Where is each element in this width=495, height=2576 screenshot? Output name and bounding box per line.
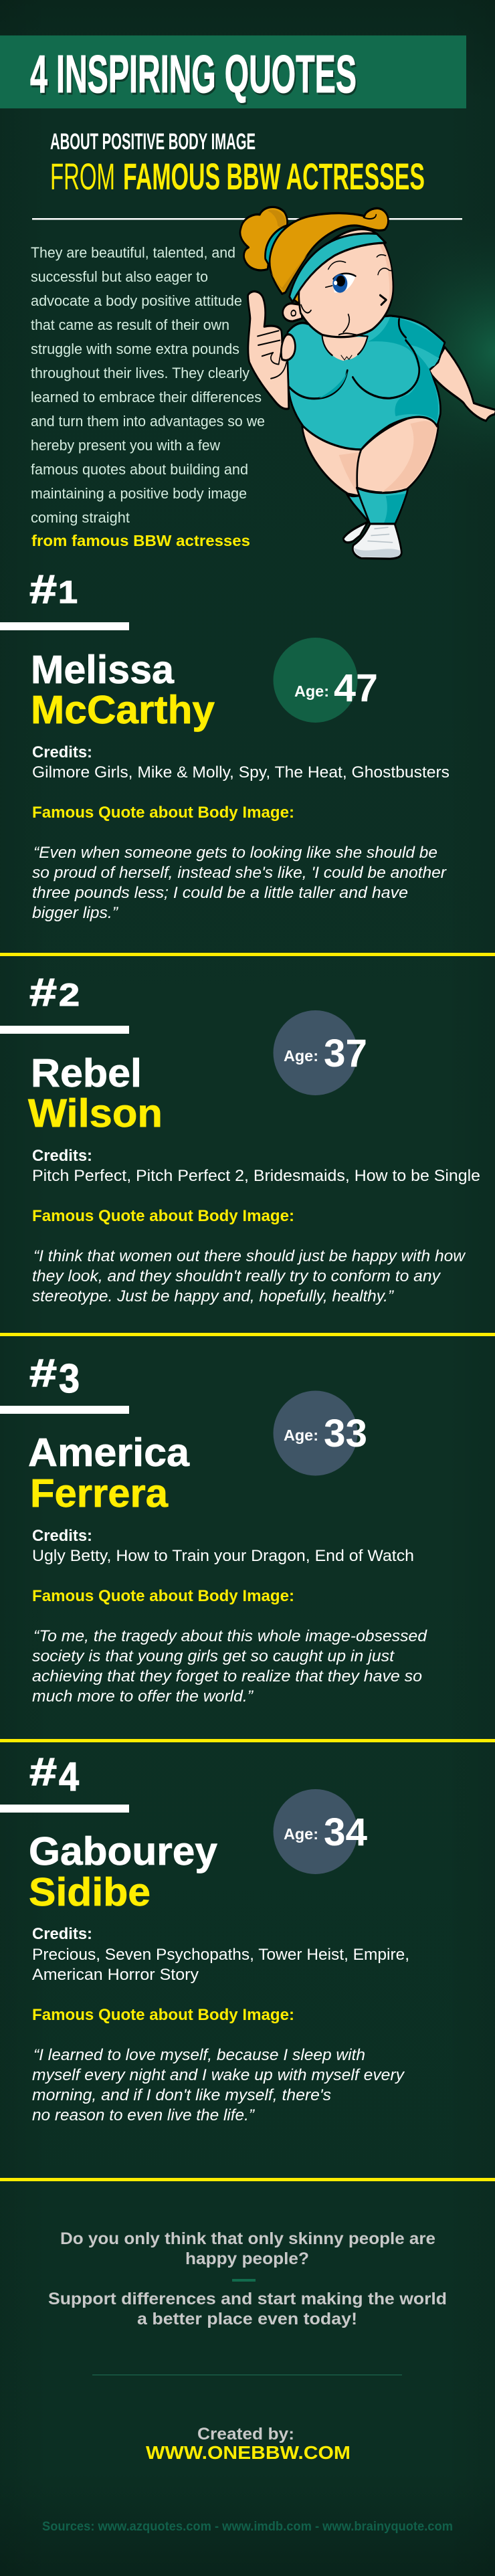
quote: Famous Quote about Body Image: <box>32 2006 294 2024</box>
intro text: from famous BBW actresses <box>31 532 250 549</box>
age badge <box>273 638 378 723</box>
section 4: Gabourey Sidibe <box>0 1750 409 2124</box>
rank number: 3 <box>59 1356 80 1401</box>
section 2: Rebel Wilson <box>0 971 480 1305</box>
name: Ferrera <box>30 1471 169 1515</box>
intro text: throughout their lives. They clearly <box>31 365 250 381</box>
quote <box>32 1207 466 1305</box>
credits: Pitch Perfect, Pitch Perfect 2, Bridesmaids, How to be Single <box>32 1167 480 1185</box>
intro text: They are beautiful, talented, and <box>31 244 235 261</box>
name: Gabourey <box>29 1829 217 1873</box>
credits: Credits: <box>32 1925 92 1943</box>
name <box>28 1431 190 1515</box>
age badge: Age: <box>284 1047 318 1065</box>
credits <box>32 1925 409 1984</box>
name <box>31 648 215 732</box>
closing message <box>48 2229 447 2328</box>
subtitle <box>50 129 425 197</box>
closing message: a better place even today! <box>137 2310 357 2328</box>
title banner <box>0 35 466 108</box>
quote: “I learned to love myself, because I sleep with <box>33 2046 365 2064</box>
rank number: # <box>29 1352 57 1395</box>
quote: Famous Quote about Body Image: <box>32 1207 294 1225</box>
quote: three pounds less; I could be a little taller and have <box>32 884 408 902</box>
age badge: 33 <box>324 1412 367 1455</box>
intro text: coming straight <box>31 509 130 526</box>
age badge: 37 <box>324 1032 367 1075</box>
credit: created by: Created by: <box>197 2425 294 2444</box>
credit: created by <box>146 2425 351 2463</box>
intro text <box>31 244 265 549</box>
credits: Credits: <box>32 1527 92 1545</box>
credits: Credits: <box>32 1147 92 1165</box>
subtitle: ABOUT POSITIVE BODY IMAGE <box>50 129 256 155</box>
name: Wilson <box>28 1091 163 1135</box>
intro text: and turn them into advantages so we <box>31 413 265 430</box>
illustration: cartoon woman pointing <box>240 207 495 559</box>
quote <box>32 804 447 922</box>
name: America <box>28 1431 190 1475</box>
intro text: learned to embrace their differences <box>31 389 262 405</box>
quote: achieving that they forget to realize that they have so <box>32 1667 422 1685</box>
age badge: 47 <box>334 666 378 710</box>
rank number: 2 <box>59 977 80 1012</box>
age badge: Age: <box>284 1427 318 1444</box>
credits: Credits: <box>32 743 92 761</box>
rank number: # <box>29 567 57 612</box>
closing message: Support differences and start making the world <box>48 2290 447 2308</box>
quote: “I think that women out there should just be happy with how <box>33 1247 466 1265</box>
rank number: 4 <box>59 1754 80 1799</box>
rank number: 1 <box>58 574 78 610</box>
headband <box>290 234 386 302</box>
age badge: 34 <box>324 1811 367 1854</box>
age badge: Age: <box>284 1825 318 1843</box>
section 1: Melissa McCarthy <box>0 567 450 922</box>
age badge <box>273 1390 367 1476</box>
quote: no reason to even live the life.” <box>32 2106 255 2124</box>
credits: Precious, Seven Psychopaths, Tower Heist, Empire, <box>32 1946 409 1964</box>
intro text: struggle with some extra pounds <box>31 341 239 357</box>
quote: myself every night and I wake up with myself every <box>32 2066 405 2084</box>
intro text: famous quotes about building and <box>31 461 248 478</box>
age badge <box>273 1789 367 1874</box>
quote: they look, and they shouldn't really try to conform to any <box>32 1267 441 1285</box>
credits <box>32 1527 414 1565</box>
quote: so proud of herself, instead she's like, 'I could be another <box>32 864 447 882</box>
closing message: Do you only think that only skinny people are <box>60 2229 435 2248</box>
closing message: happy people? <box>185 2249 309 2268</box>
name: Rebel <box>31 1051 142 1095</box>
quote: “To me, the tragedy about this whole image-obsessed <box>33 1627 427 1645</box>
credits: Gilmore Girls, Mike & Molly, Spy, The Heat, Ghostbusters <box>32 763 450 781</box>
pointing hand <box>248 292 295 409</box>
section 3: America Ferrera <box>0 1352 427 1706</box>
name: Melissa <box>31 648 175 692</box>
credits <box>32 1147 480 1185</box>
subtitle: FROM <box>50 155 115 197</box>
quote <box>32 1587 427 1706</box>
quote: much more to offer the world.” <box>32 1687 254 1706</box>
name <box>29 1829 217 1914</box>
intro text: successful but also eager to <box>31 268 208 285</box>
intro text: hereby present you with a few <box>31 437 220 454</box>
quote: society is that young girls get so caught up in just <box>32 1647 395 1665</box>
credits <box>32 743 450 781</box>
name: McCarthy <box>31 688 215 732</box>
credit: created by: WWW.ONEBBW.COM <box>146 2442 351 2463</box>
age badge: Age: <box>294 682 329 700</box>
quote: morning, and if I don't like myself, there's <box>32 2086 331 2104</box>
quote: “Even when someone gets to looking like she should be <box>33 844 437 862</box>
age badge <box>273 1010 367 1095</box>
credits: American Horror Story <box>32 1966 199 1984</box>
intro text: advocate a body positive attitude <box>31 292 242 309</box>
quote: Famous Quote about Body Image: <box>32 804 294 822</box>
rank number: # <box>29 971 57 1014</box>
name: Sidibe <box>29 1870 151 1914</box>
rank number: # <box>29 1750 57 1794</box>
credits: Ugly Betty, How to Train your Dragon, End of Watch <box>32 1547 414 1565</box>
quote: bigger lips.” <box>32 904 118 922</box>
quote <box>32 2006 405 2124</box>
quote: stereotype. Just be happy and, hopefully, healthy.” <box>32 1287 394 1305</box>
quote: Famous Quote about Body Image: <box>32 1587 294 1605</box>
face details <box>301 255 392 336</box>
intro text: that came as result of their own <box>31 316 229 333</box>
intro text: maintaining a positive body image <box>31 485 247 502</box>
sources: Sources: www.azquotes.com - www.imdb.com - www.brainyquote.com <box>42 2520 453 2534</box>
name <box>28 1051 163 1135</box>
